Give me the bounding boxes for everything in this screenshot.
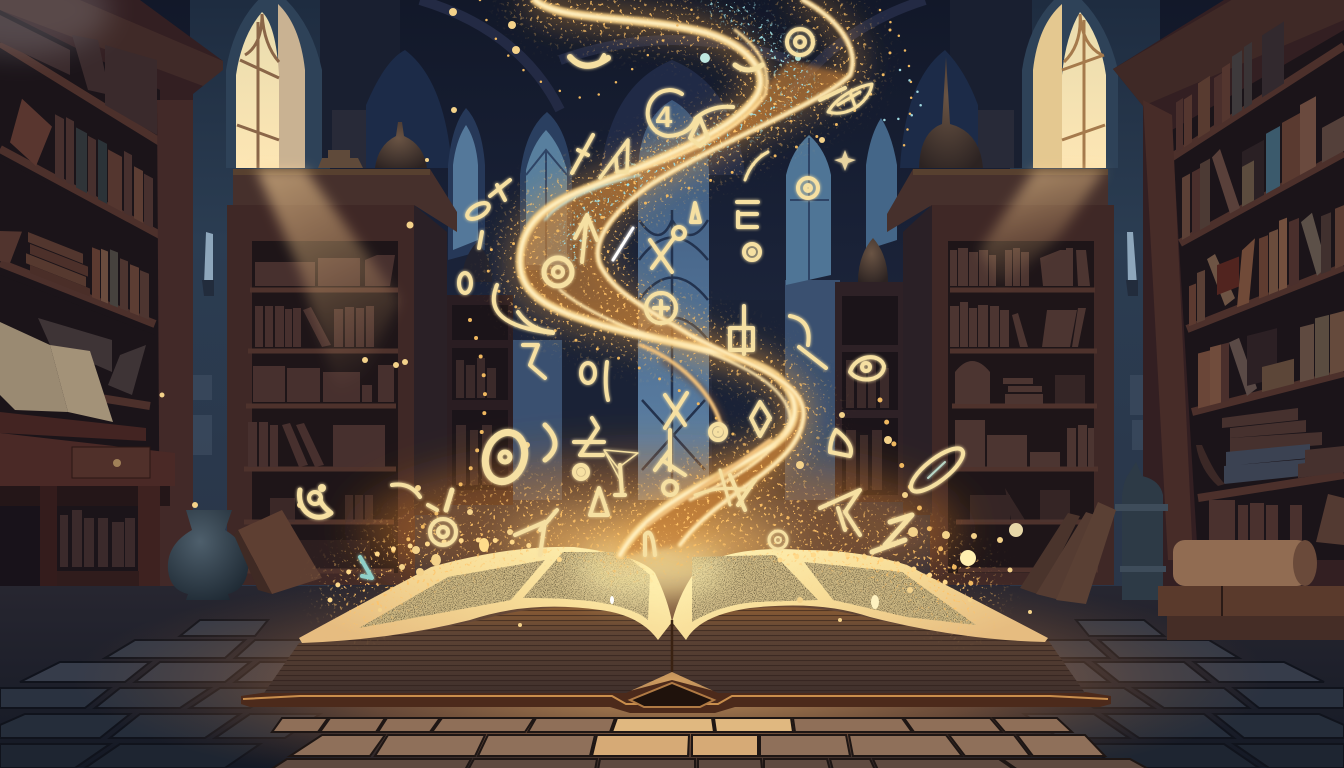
books row 2 — [1182, 81, 1344, 240]
left middle bookcase — [227, 169, 457, 585]
book stacks row 5 — [1196, 408, 1344, 486]
right page block — [672, 607, 1085, 693]
books row 1 — [1176, 21, 1284, 152]
swirl bright bands — [520, 0, 853, 555]
book cover — [241, 680, 1111, 713]
glow behind the book — [360, 455, 960, 605]
shelf boards — [0, 43, 165, 406]
left page block — [264, 608, 672, 693]
far bookcases — [445, 238, 903, 505]
right large bookcase — [1113, 0, 1344, 600]
books row 6 — [1209, 494, 1344, 545]
open glowing book — [241, 540, 1111, 713]
swirl outer glow — [520, 0, 853, 555]
floor stones — [0, 620, 325, 768]
glowing rune symbols — [299, 29, 969, 578]
right top arched window — [1022, 0, 1118, 168]
spark trails — [330, 0, 980, 600]
rune ring with 4 and tail: 4 — [656, 101, 673, 134]
books row 2 — [10, 87, 153, 228]
light beams — [256, 169, 1105, 415]
books row 3 — [1189, 195, 1344, 326]
stack and leaning book by desk — [38, 318, 146, 395]
large sparks — [160, 8, 1032, 627]
letter runes — [360, 55, 912, 578]
urns on bookcases — [318, 57, 983, 168]
swirl grain — [360, 0, 960, 590]
background: stone hall wall — [0, 0, 1344, 600]
rune ring with 4 and tail — [648, 90, 733, 136]
blue gothic windows — [448, 60, 897, 500]
left page — [299, 547, 672, 643]
page text blocks — [359, 552, 976, 628]
left large bookcase — [0, 0, 223, 600]
right-side props: canister, leaning books, scroll, crates — [1020, 462, 1344, 640]
wall sconces — [180, 232, 1160, 455]
stacks top — [0, 15, 157, 135]
books row 4 — [1198, 311, 1344, 408]
left-side props: vase, leaning book — [168, 510, 322, 600]
books — [950, 248, 1094, 522]
floor — [0, 560, 1344, 768]
page glow — [575, 540, 725, 600]
hazy light in the corner — [0, 0, 110, 55]
swirl dark hollow — [665, 362, 722, 430]
swirl translucent sheet — [520, 60, 850, 555]
floor bricks under book — [270, 718, 1150, 768]
left desk with open book — [0, 322, 175, 640]
right middle bookcase — [887, 169, 1114, 585]
star rune — [834, 150, 856, 171]
shelf boards — [950, 290, 1098, 570]
gutter — [671, 620, 673, 672]
left top arched window — [226, 0, 322, 168]
shelf boards — [242, 290, 398, 571]
books row 3 — [0, 206, 149, 320]
ring runes — [299, 29, 969, 549]
shelf boards — [1172, 46, 1344, 498]
books — [248, 255, 395, 570]
magic swirl of light — [160, 0, 1032, 627]
right page — [672, 549, 1048, 642]
